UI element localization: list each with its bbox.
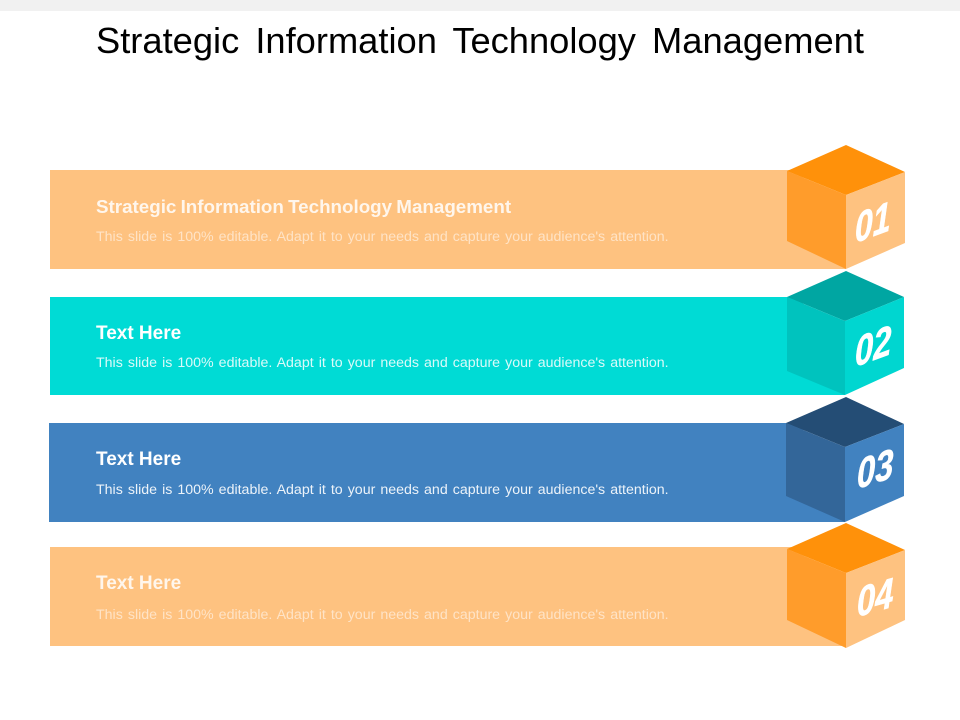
icon: cube 04 <box>787 523 905 648</box>
banner 3 <box>49 423 845 522</box>
icon: cube 03: 03 <box>857 440 893 499</box>
row 4 body text: This slide is 100% editable. Adapt it to your needs and capture your audience's attention. <box>96 607 669 623</box>
banner 2 <box>50 297 845 395</box>
panel: row 4 <box>50 523 905 648</box>
row 2 heading: Text Here <box>96 323 181 344</box>
row 4 heading: Text Here <box>96 573 181 594</box>
icon: cube 01: 01 <box>855 193 891 253</box>
banner 4 <box>50 547 846 646</box>
icon: cube 02 <box>787 271 904 395</box>
panel: row 2 <box>50 271 904 395</box>
banner 1 <box>50 170 846 269</box>
title: Strategic Information Technology Management <box>96 20 864 61</box>
icon: cube 03 <box>786 397 904 522</box>
row 3 heading: Text Here <box>96 449 181 470</box>
row 1 body text: This slide is 100% editable. Adapt it to your needs and capture your audience's attention. <box>96 229 669 245</box>
row 1 heading: Strategic Information Technology Management <box>96 196 512 217</box>
panel: row 3 <box>49 397 904 522</box>
icon: cube 02: 02 <box>855 317 892 377</box>
icon: cube 01 <box>787 145 905 269</box>
row 2 body text: This slide is 100% editable. Adapt it to your needs and capture your audience's attention. <box>96 355 669 371</box>
panel: row 1 <box>50 145 905 269</box>
icon: cube 04: 04 <box>857 569 893 627</box>
row 3 body text: This slide is 100% editable. Adapt it to your needs and capture your audience's attention. <box>96 482 669 498</box>
